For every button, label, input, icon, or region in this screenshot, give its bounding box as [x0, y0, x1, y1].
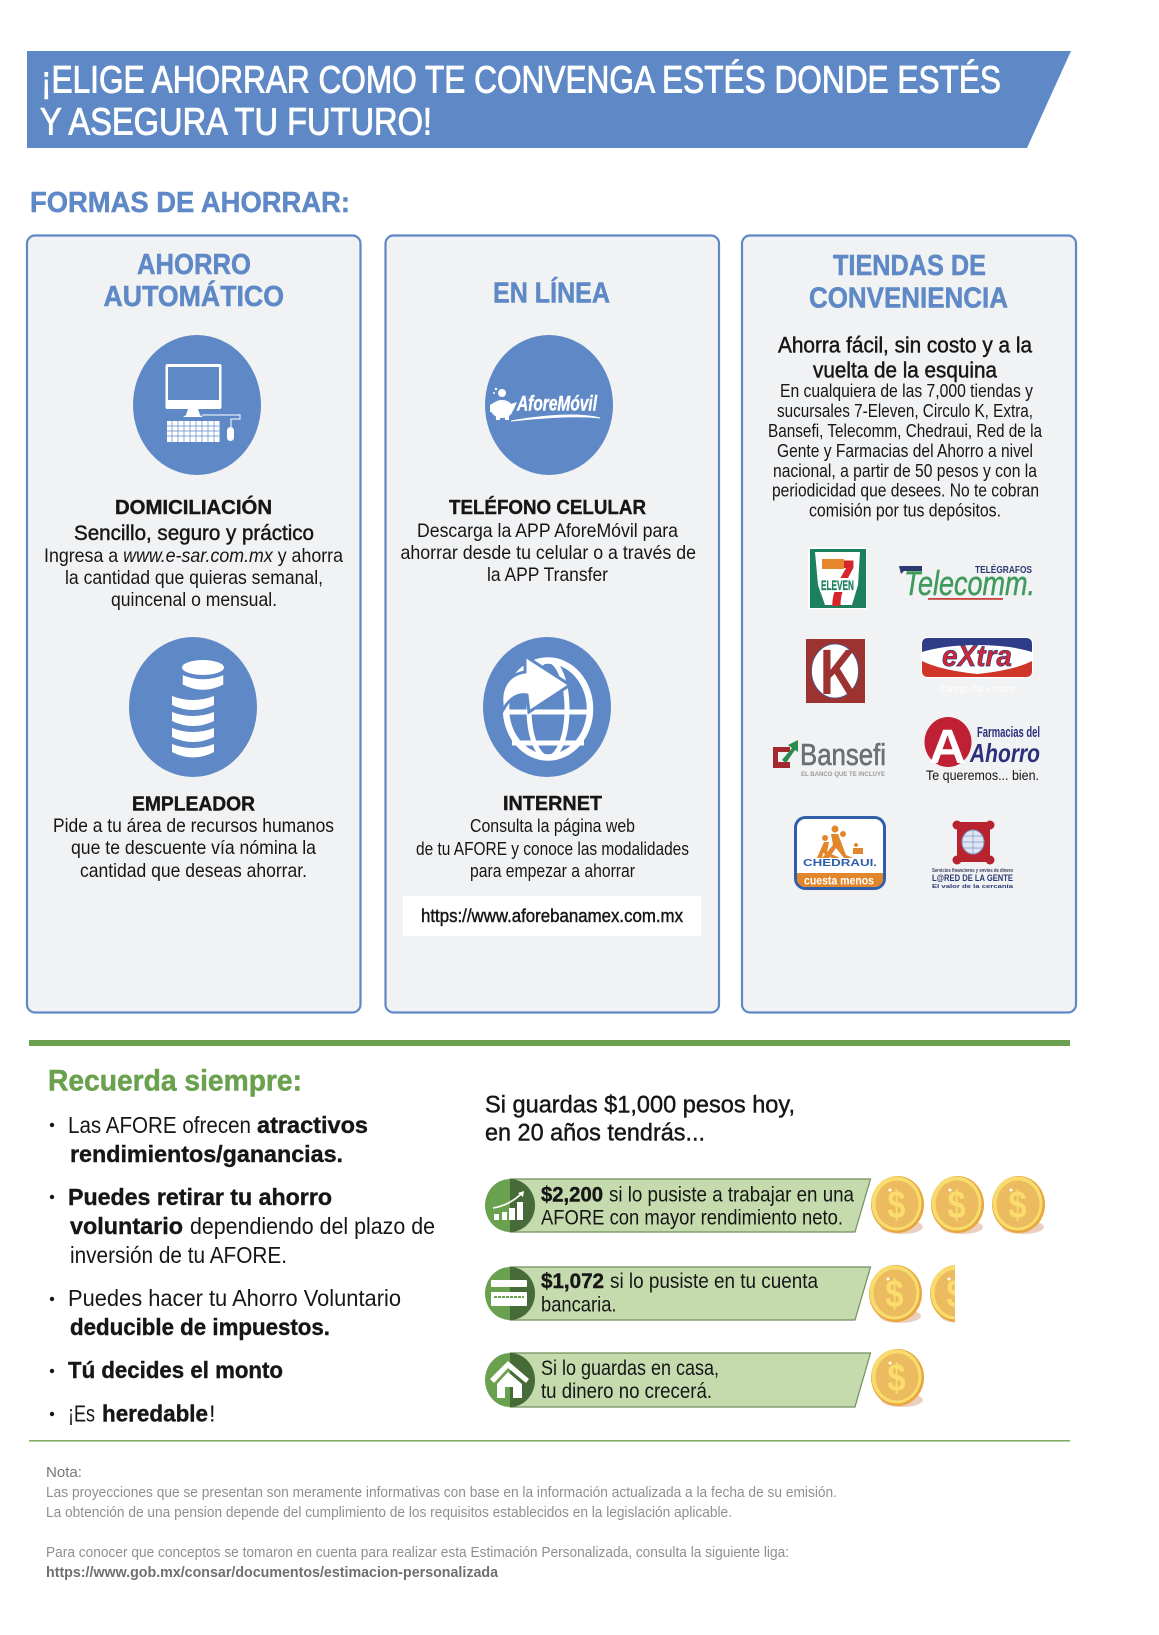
savings row: AFORE: AFORE con mayor rendimiento neto.	[541, 1206, 843, 1230]
reminders list: ¡Es	[68, 1400, 95, 1426]
reminders list: Puedes hacer tu Ahorro Voluntario	[68, 1285, 401, 1311]
reminders list: heredable	[102, 1400, 208, 1426]
method: empleador: Pide a tu área de recursos humanos	[53, 815, 334, 837]
savings row: en casa: tu dinero no crecerá.	[541, 1379, 712, 1403]
logo: Red de la Gente: Servicios financieros y envíos de dinero	[932, 868, 1013, 874]
coins: cuenta bancaria row	[869, 1265, 955, 1323]
coins: AFORE row: $	[888, 1184, 906, 1227]
logo: Bansefi	[773, 737, 886, 778]
method: internet: de tu AFORE y conoce las modalidades	[416, 838, 689, 859]
panel heading: tiendas de conveniencia: TIENDAS DE	[833, 250, 986, 282]
method: internet: Consulta la página web	[470, 815, 635, 836]
panel heading: en línea: EN LÍNEA	[493, 276, 610, 310]
footnote: https://www.gob.mx/consar/documentos/estimacion-personalizada	[46, 1565, 499, 1581]
savings row: AFORE: si lo pusiste a trabajar en una	[609, 1182, 854, 1206]
method: teléfono celular: Descarga la APP AforeMóvil para	[417, 520, 678, 542]
panel heading: tiendas de conveniencia	[809, 250, 1008, 314]
footnote: Nota:	[46, 1465, 82, 1481]
method: empleador	[53, 792, 334, 882]
coins: cuenta bancaria row: $	[886, 1273, 904, 1316]
reminders list	[50, 1112, 435, 1426]
panel: ahorro automático	[27, 236, 360, 1012]
reminders list: !	[209, 1400, 216, 1426]
logo: 7-Eleven: 7	[824, 546, 856, 620]
coins: AFORE row	[871, 1176, 1045, 1234]
savings row: cuenta bancaria: si lo pusiste en tu cuenta	[610, 1269, 818, 1293]
coin: en casa row	[871, 1349, 924, 1407]
title banner	[27, 51, 1071, 148]
reminders list: Tú decides el monto	[68, 1357, 283, 1383]
logo: Chedraui: cuesta menos	[804, 876, 874, 888]
url box: https://www.aforebanamex.com.mx	[421, 905, 684, 926]
footnote: Para conocer que conceptos se tomaron en cuenta para realizar esta Estimación Personalizada, consulta la siguiente liga:	[46, 1545, 789, 1561]
savings row: AFORE: $2,200	[541, 1182, 603, 1206]
logo: Telecomm: TELÉGRAFOS	[975, 563, 1032, 576]
method: domiciliación: Sencillo, seguro y práctico	[74, 522, 314, 545]
savings heading	[485, 1092, 795, 1146]
logo: Farmacias del Ahorro: Farmacias del	[977, 724, 1040, 741]
method: domiciliación	[44, 495, 343, 611]
convenience stores text: sucursales 7-Eleven, Circulo K, Extra,	[777, 401, 1033, 421]
title banner: Y ASEGURA TU FUTURO!	[40, 102, 432, 144]
icon: globe with arrow	[483, 637, 611, 777]
icon: growth chart	[485, 1179, 535, 1232]
url box	[403, 896, 701, 936]
reminders list: Las AFORE ofrecen	[68, 1112, 251, 1138]
logo: Farmacias del Ahorro: A	[929, 721, 966, 774]
savings row: AFORE	[485, 1179, 870, 1232]
reminders list: Puedes retirar tu ahorro	[68, 1184, 332, 1210]
icon: AforeMóvil logo: AforeMóvil	[516, 392, 598, 416]
convenience stores text: nacional, a partir de 50 pesos y con la	[773, 461, 1038, 481]
method: empleador: cantidad que deseas ahorrar.	[80, 860, 307, 882]
method: internet: INTERNET	[503, 792, 602, 815]
savings row: cuenta bancaria: $1,072	[541, 1269, 604, 1293]
reminders list: atractivos	[257, 1112, 368, 1138]
reminders list: rendimientos/ganancias.	[70, 1141, 343, 1167]
method: teléfono celular: la APP Transfer	[487, 564, 608, 586]
logo: Red de la Gente	[932, 820, 1014, 890]
icon: computer	[133, 335, 261, 475]
panel heading: ahorro automático: AHORRO	[137, 249, 251, 281]
convenience stores text: vuelta de la esquina	[813, 358, 998, 382]
reminders list: voluntario	[70, 1213, 183, 1239]
method: internet: para empezar a ahorrar	[470, 860, 635, 881]
coins: cuenta bancaria row: $	[946, 1273, 965, 1316]
method: teléfono celular: TELÉFONO CELULAR	[449, 496, 646, 519]
savings row: en casa: Si lo guardas en casa,	[541, 1356, 719, 1380]
panel: tiendas de conveniencia	[742, 236, 1076, 1012]
heading: recuerda siempre: Recuerda siempre:	[48, 1064, 302, 1098]
logo: Extra: eXtra	[942, 640, 1012, 673]
savings heading: en 20 años tendrás...	[485, 1120, 705, 1146]
method: internet	[416, 792, 689, 881]
logo: Red de la Gente: L@RED DE LA GENTE	[932, 873, 1013, 884]
method: domiciliación: DOMICILIACIÓN	[115, 495, 272, 519]
logo: Farmacias del Ahorro: Ahorro	[969, 738, 1040, 768]
section heading: formas de ahorrar: FORMAS DE AHORRAR:	[30, 187, 350, 219]
savings row: en casa	[485, 1353, 870, 1407]
method: empleador: EMPLEADOR	[132, 792, 255, 816]
coins: AFORE row: $	[948, 1184, 966, 1227]
logo: Bansefi: EL BANCO QUE TE INCLUYE	[801, 771, 886, 778]
logo: Extra	[921, 637, 1033, 695]
panel heading: ahorro automático	[104, 249, 284, 313]
convenience stores text: Bansefi, Telecomm, Chedraui, Red de la	[768, 421, 1043, 441]
reminders list: deducible de impuestos.	[70, 1314, 330, 1340]
logo: Circle K: K	[820, 636, 856, 708]
convenience stores text: comisión por tus depósitos.	[809, 500, 1001, 520]
panel heading: ahorro automático: AUTOMÁTICO	[104, 279, 284, 313]
convenience stores text: periodicidad que desees. No te cobran	[772, 480, 1039, 500]
logo: Extra: Contigo día y noche	[940, 684, 1015, 695]
convenience stores text: En cualquiera de las 7,000 tiendas y	[780, 381, 1033, 401]
method: domiciliación: Ingresa a www.e-sar.com.mx y ahorra	[44, 545, 343, 567]
icon: bank card	[485, 1267, 535, 1320]
coins: AFORE row: $	[1008, 1184, 1027, 1227]
icon: house	[485, 1353, 535, 1407]
savings row: cuenta bancaria: bancaria.	[541, 1292, 616, 1316]
icon: stacked coins	[129, 637, 257, 777]
convenience stores text	[768, 332, 1043, 520]
convenience stores text: Ahorra fácil, sin costo y a la	[778, 332, 1033, 358]
method: teléfono celular	[400, 496, 696, 586]
method: empleador: que te descuente vía nómina la	[71, 837, 316, 859]
footnote	[46, 1465, 837, 1581]
convenience stores text: Gente y Farmacias del Ahorro a nivel	[777, 441, 1033, 461]
footnote: La obtención de una pension depende del cumplimiento de los requisitos establecidos en la legislación aplicable.	[46, 1505, 732, 1521]
reminders list: dependiendo del plazo de	[190, 1213, 435, 1239]
logo: Farmacias del Ahorro	[924, 717, 1040, 783]
logo: Red de la Gente: El valor de la cercanía	[932, 884, 1014, 890]
logo: Telecomm: Telecomm.	[904, 565, 1035, 603]
icon: AforeMóvil logo	[485, 335, 613, 475]
logo: Chedraui	[796, 818, 884, 888]
method: domiciliación: quincenal o mensual.	[111, 589, 277, 611]
coin: en casa row: $	[888, 1357, 906, 1400]
reminders list: inversión de tu AFORE.	[70, 1242, 287, 1268]
footnote: Las proyecciones que se presentan son meramente informativas con base en la información actualizada a la fecha de su emisión.	[46, 1485, 837, 1501]
method: domiciliación: la cantidad que quieras semanal,	[65, 567, 323, 589]
logo: 7-Eleven: ELEVEN	[821, 577, 854, 593]
logo: Bansefi: Bansefi	[800, 737, 886, 772]
method: teléfono celular: ahorrar desde tu celular o a través de	[400, 542, 696, 564]
logo: Farmacias del Ahorro: Te queremos... bien.	[926, 767, 1039, 783]
savings row: cuenta bancaria	[485, 1267, 870, 1320]
logo: Chedraui: CHEDRAUI.	[803, 858, 877, 869]
panel: en línea	[386, 236, 719, 1012]
panel heading: tiendas de conveniencia: CONVENIENCIA	[809, 282, 1008, 314]
savings heading: Si guardas $1,000 pesos hoy,	[485, 1092, 795, 1118]
logo: 7-Eleven	[808, 546, 867, 620]
